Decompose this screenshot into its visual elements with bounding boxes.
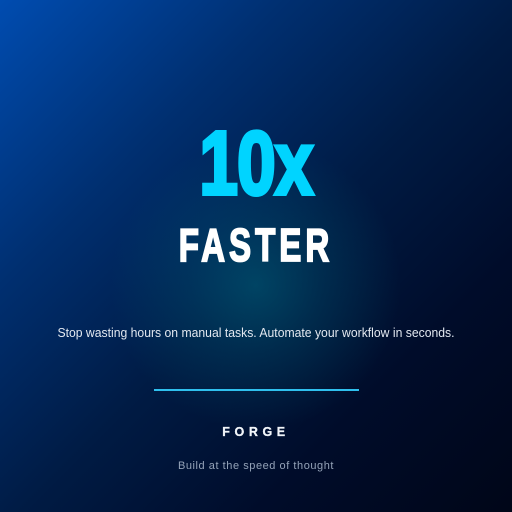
headline number: 10x: 10x — [199, 114, 313, 214]
brand name: FORGE: FORGE — [222, 425, 290, 439]
description text: Stop wasting hours on manual tasks. Automate your workflow in seconds. — [57, 326, 455, 340]
heading: FASTER: FASTER — [179, 219, 333, 271]
accent divider line — [154, 389, 359, 391]
tagline: Build at the speed of thought — [178, 460, 334, 472]
